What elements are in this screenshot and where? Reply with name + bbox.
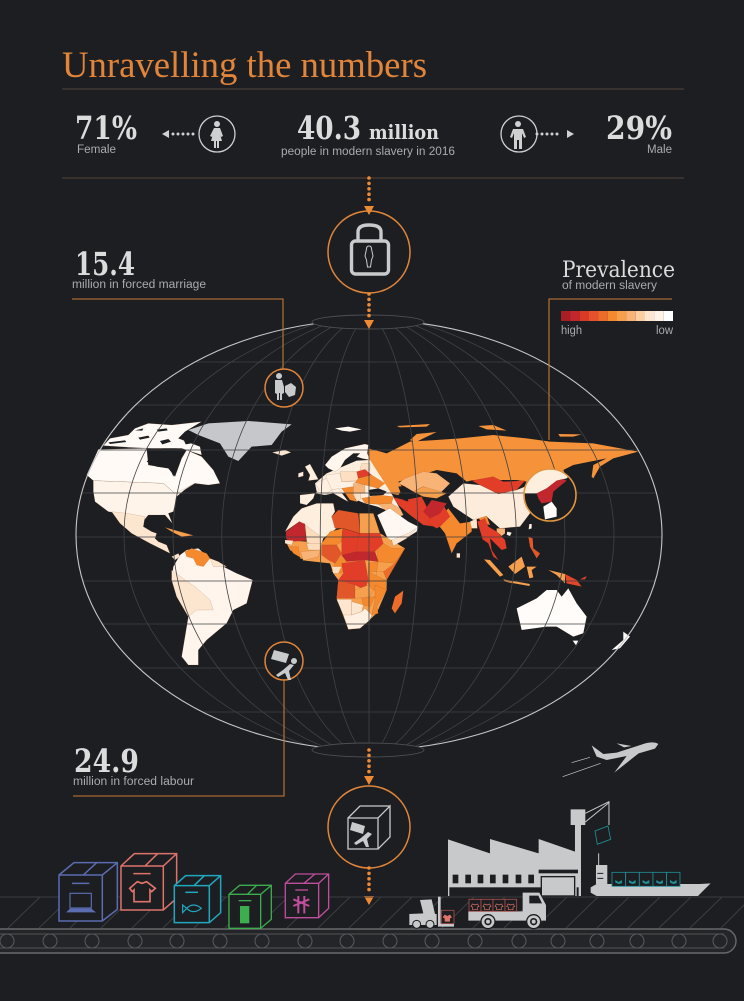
legend: prevalence: Prevalence xyxy=(562,258,675,283)
cargo ship xyxy=(591,853,711,896)
icon: male figure with arrow xyxy=(501,116,574,152)
connector: forced labour xyxy=(73,680,284,796)
legend swatches xyxy=(561,311,673,321)
box: mobile phone xyxy=(229,885,271,928)
box: fish xyxy=(174,876,221,923)
stat: 71% female: Female xyxy=(77,144,116,156)
product boxes xyxy=(59,854,329,928)
icon: padlock with figure xyxy=(328,211,410,293)
Africa xyxy=(285,503,417,629)
factory xyxy=(448,802,611,896)
North America and Greenland xyxy=(87,421,292,525)
callout: North Korea magnifier xyxy=(522,467,578,521)
legend: prevalence xyxy=(561,258,675,337)
connector: forced marriage xyxy=(72,299,283,369)
icon: forced labour xyxy=(265,642,303,680)
stat: 71% female xyxy=(75,109,137,156)
stat: 40.3 million: million xyxy=(369,120,439,144)
Southeast Asia xyxy=(470,516,587,587)
stat: 24.9 million forced labour: 24.9 xyxy=(74,742,139,780)
stat: 40.3 million: 40.3 xyxy=(297,109,361,147)
dotted arrow to conveyor xyxy=(364,868,374,905)
stat: 71% female: 71% xyxy=(75,109,137,147)
conveyor belt xyxy=(0,897,744,953)
stat: 15.4 million forced marriage xyxy=(72,245,206,291)
dotted arrow to box xyxy=(364,750,374,785)
bottom pole cap xyxy=(312,743,424,757)
stat: 40.3 million xyxy=(281,109,455,158)
forklift xyxy=(409,897,454,928)
Europe and Middle East xyxy=(298,444,450,540)
transport scene xyxy=(409,742,711,929)
connector: prevalence xyxy=(549,299,672,440)
box: clothing xyxy=(121,854,177,910)
box: bamboo xyxy=(285,874,329,918)
dotted arrow from lock to map xyxy=(364,294,374,329)
Russia and Asia xyxy=(368,424,638,650)
dotted arrow to lock xyxy=(364,178,374,215)
stat: 29% male: 29% xyxy=(606,109,672,147)
stat: 29% male: Male xyxy=(647,144,672,156)
icon: box with worker xyxy=(328,786,410,868)
stat: 15.4 million forced marriage: 15.4 xyxy=(75,245,135,283)
stat: 40.3 million: people in modern slavery in 2016 xyxy=(281,146,455,158)
icon: airplane xyxy=(563,742,658,777)
legend: prevalence: low xyxy=(656,325,674,337)
Central and South America xyxy=(112,427,362,665)
world map xyxy=(60,315,680,757)
legend: prevalence: high xyxy=(561,325,582,337)
icon: female figure with arrow xyxy=(162,116,235,152)
stat: 24.9 million forced labour: million in forced labour xyxy=(73,776,194,788)
icon: forced marriage xyxy=(265,369,303,407)
title: Unravelling the numbers xyxy=(62,45,427,86)
box: electronics xyxy=(59,863,117,921)
globe outline xyxy=(76,320,662,750)
stat: 24.9 million forced labour xyxy=(73,742,194,788)
legend: prevalence: of modern slavery xyxy=(562,280,657,292)
stat: 15.4 million forced marriage: million in forced marriage xyxy=(72,279,206,291)
delivery truck xyxy=(468,893,546,929)
top pole cap xyxy=(312,315,424,329)
